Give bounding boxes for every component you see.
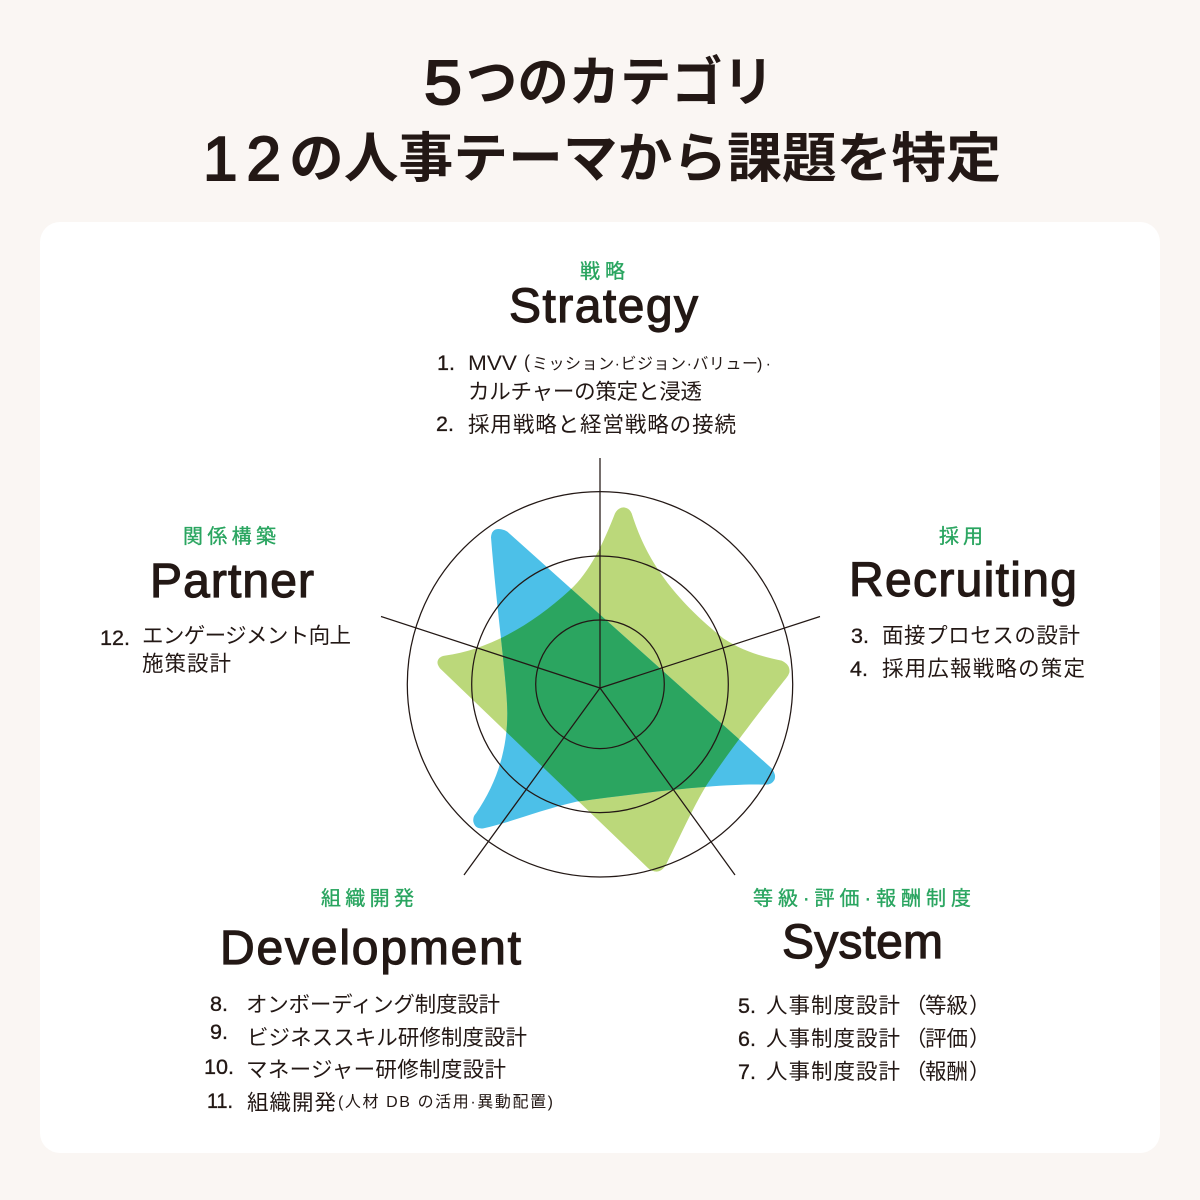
section: Development: オンボーディング制度設計 xyxy=(246,993,500,1017)
section: Development: マネージャー研修制度設計 xyxy=(246,1058,506,1082)
section: System: System xyxy=(782,916,943,969)
radar area: overlap xyxy=(500,588,739,802)
section: Strategy: ( xyxy=(524,352,530,372)
section: System: ） xyxy=(969,1027,991,1051)
section: Development: Development xyxy=(220,922,521,975)
title xyxy=(203,49,1001,194)
section: Strategy: ミッション·ビジョン·バリュー xyxy=(532,355,758,373)
section: Strategy: カルチャーの策定と浸透 xyxy=(468,380,702,404)
title: 5 xyxy=(424,49,462,118)
section: System: 人事制度設計 xyxy=(766,1027,900,1051)
radar chart xyxy=(381,458,820,877)
section: Recruiting: 4. xyxy=(850,657,868,681)
section: Recruiting xyxy=(849,525,1085,681)
section: System: 等級·評価·報酬制度 xyxy=(753,887,971,910)
section: Development: 8. xyxy=(210,992,228,1016)
section: Partner: 12. xyxy=(100,626,130,650)
section: System: 等級 xyxy=(925,994,968,1018)
section: System: 評価 xyxy=(925,1027,968,1051)
panel: white card xyxy=(40,222,1160,1153)
title: 12 xyxy=(203,125,281,194)
section: Partner: Partner xyxy=(150,555,314,608)
section: Strategy: 採用戦略と経営戦略の接続 xyxy=(468,413,736,437)
section: Strategy: MVV xyxy=(468,351,518,375)
section: Recruiting: Recruiting xyxy=(849,554,1077,607)
section: Development: 10. xyxy=(204,1055,234,1079)
section: System: 報酬 xyxy=(925,1060,968,1084)
section: Partner: 施策設計 xyxy=(142,652,231,676)
section: System: 6. xyxy=(738,1027,756,1051)
section: System xyxy=(738,887,991,1084)
radar area: blue series xyxy=(473,529,775,828)
section: Development: 組織開発 xyxy=(321,887,414,910)
section: System: ） xyxy=(969,1060,991,1084)
section: Development: 11. xyxy=(207,1089,233,1113)
section: Strategy: 2. xyxy=(436,412,454,436)
section: Development: 組織開発 xyxy=(247,1091,336,1115)
section: System: ） xyxy=(969,994,991,1018)
section: Development: ビジネススキル研修制度設計 xyxy=(247,1026,527,1050)
radar grid rings and spokes xyxy=(381,458,820,877)
section: Recruiting: 採用 xyxy=(939,525,983,548)
section: Strategy: Strategy xyxy=(509,280,698,333)
section: Strategy: 1. xyxy=(437,351,455,375)
section: Recruiting: 採用広報戦略の策定 xyxy=(882,657,1085,681)
section: System: （ xyxy=(905,994,927,1018)
section: Development xyxy=(204,887,553,1115)
title: つのカテゴリ xyxy=(466,53,774,113)
section: Development: 9. xyxy=(210,1020,228,1044)
section: System: 7. xyxy=(738,1060,756,1084)
section: Development: (人材 DB の活用·異動配置) xyxy=(338,1093,553,1111)
section: Recruiting: 面接プロセスの設計 xyxy=(882,624,1080,648)
radar area: green series xyxy=(437,507,790,872)
section: Strategy: )· xyxy=(757,356,771,373)
section: System: 人事制度設計 xyxy=(766,1060,900,1084)
section: Recruiting: 3. xyxy=(851,624,869,648)
section: System: 5. xyxy=(738,994,756,1018)
section: Partner: エンゲージメント向上 xyxy=(142,624,351,648)
section: Partner xyxy=(100,525,351,676)
section: System: （ xyxy=(905,1060,927,1084)
title: の人事テーマから課題を特定 xyxy=(289,129,1001,189)
section: System: （ xyxy=(905,1027,927,1051)
section: System: 人事制度設計 xyxy=(766,994,900,1018)
section: Strategy: 戦略 xyxy=(580,260,625,283)
section: Strategy xyxy=(436,260,771,437)
section: Partner: 関係構築 xyxy=(183,525,276,548)
